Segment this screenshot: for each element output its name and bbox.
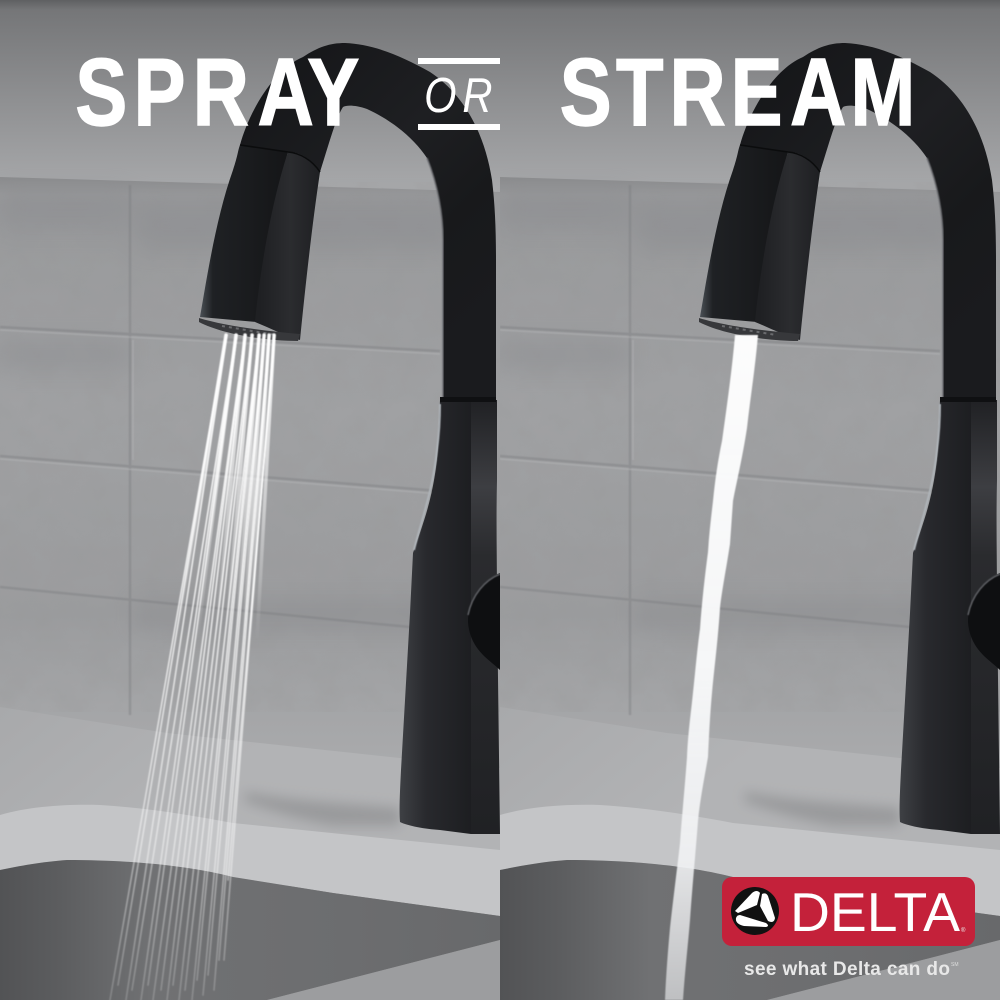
- faucet: matte black pull-down: [699, 43, 1000, 834]
- service mark: SM: [951, 962, 958, 968]
- heading: SPRAY: SPRAY: [75, 38, 359, 146]
- water: spray pattern: [110, 335, 275, 1000]
- panel: spray: [0, 0, 500, 1000]
- heading: OR badge: OR: [424, 68, 492, 123]
- tagline: see what Delta can do: [744, 959, 950, 980]
- background: kitchen wall and counter: [0, 0, 500, 1000]
- panel: stream: [500, 0, 1000, 1000]
- background: kitchen wall and counter: [500, 0, 1000, 1000]
- faucet: matte black pull-down: [199, 43, 500, 834]
- icon: Delta triangle mark: [731, 887, 779, 935]
- logo wordmark: DELTA: [790, 881, 960, 943]
- registered mark: ®: [961, 927, 966, 934]
- water: laminar stream: [665, 335, 758, 1000]
- heading: OR badge: [418, 58, 500, 130]
- heading: STREAM: STREAM: [560, 38, 915, 146]
- logo: Delta: [722, 877, 975, 946]
